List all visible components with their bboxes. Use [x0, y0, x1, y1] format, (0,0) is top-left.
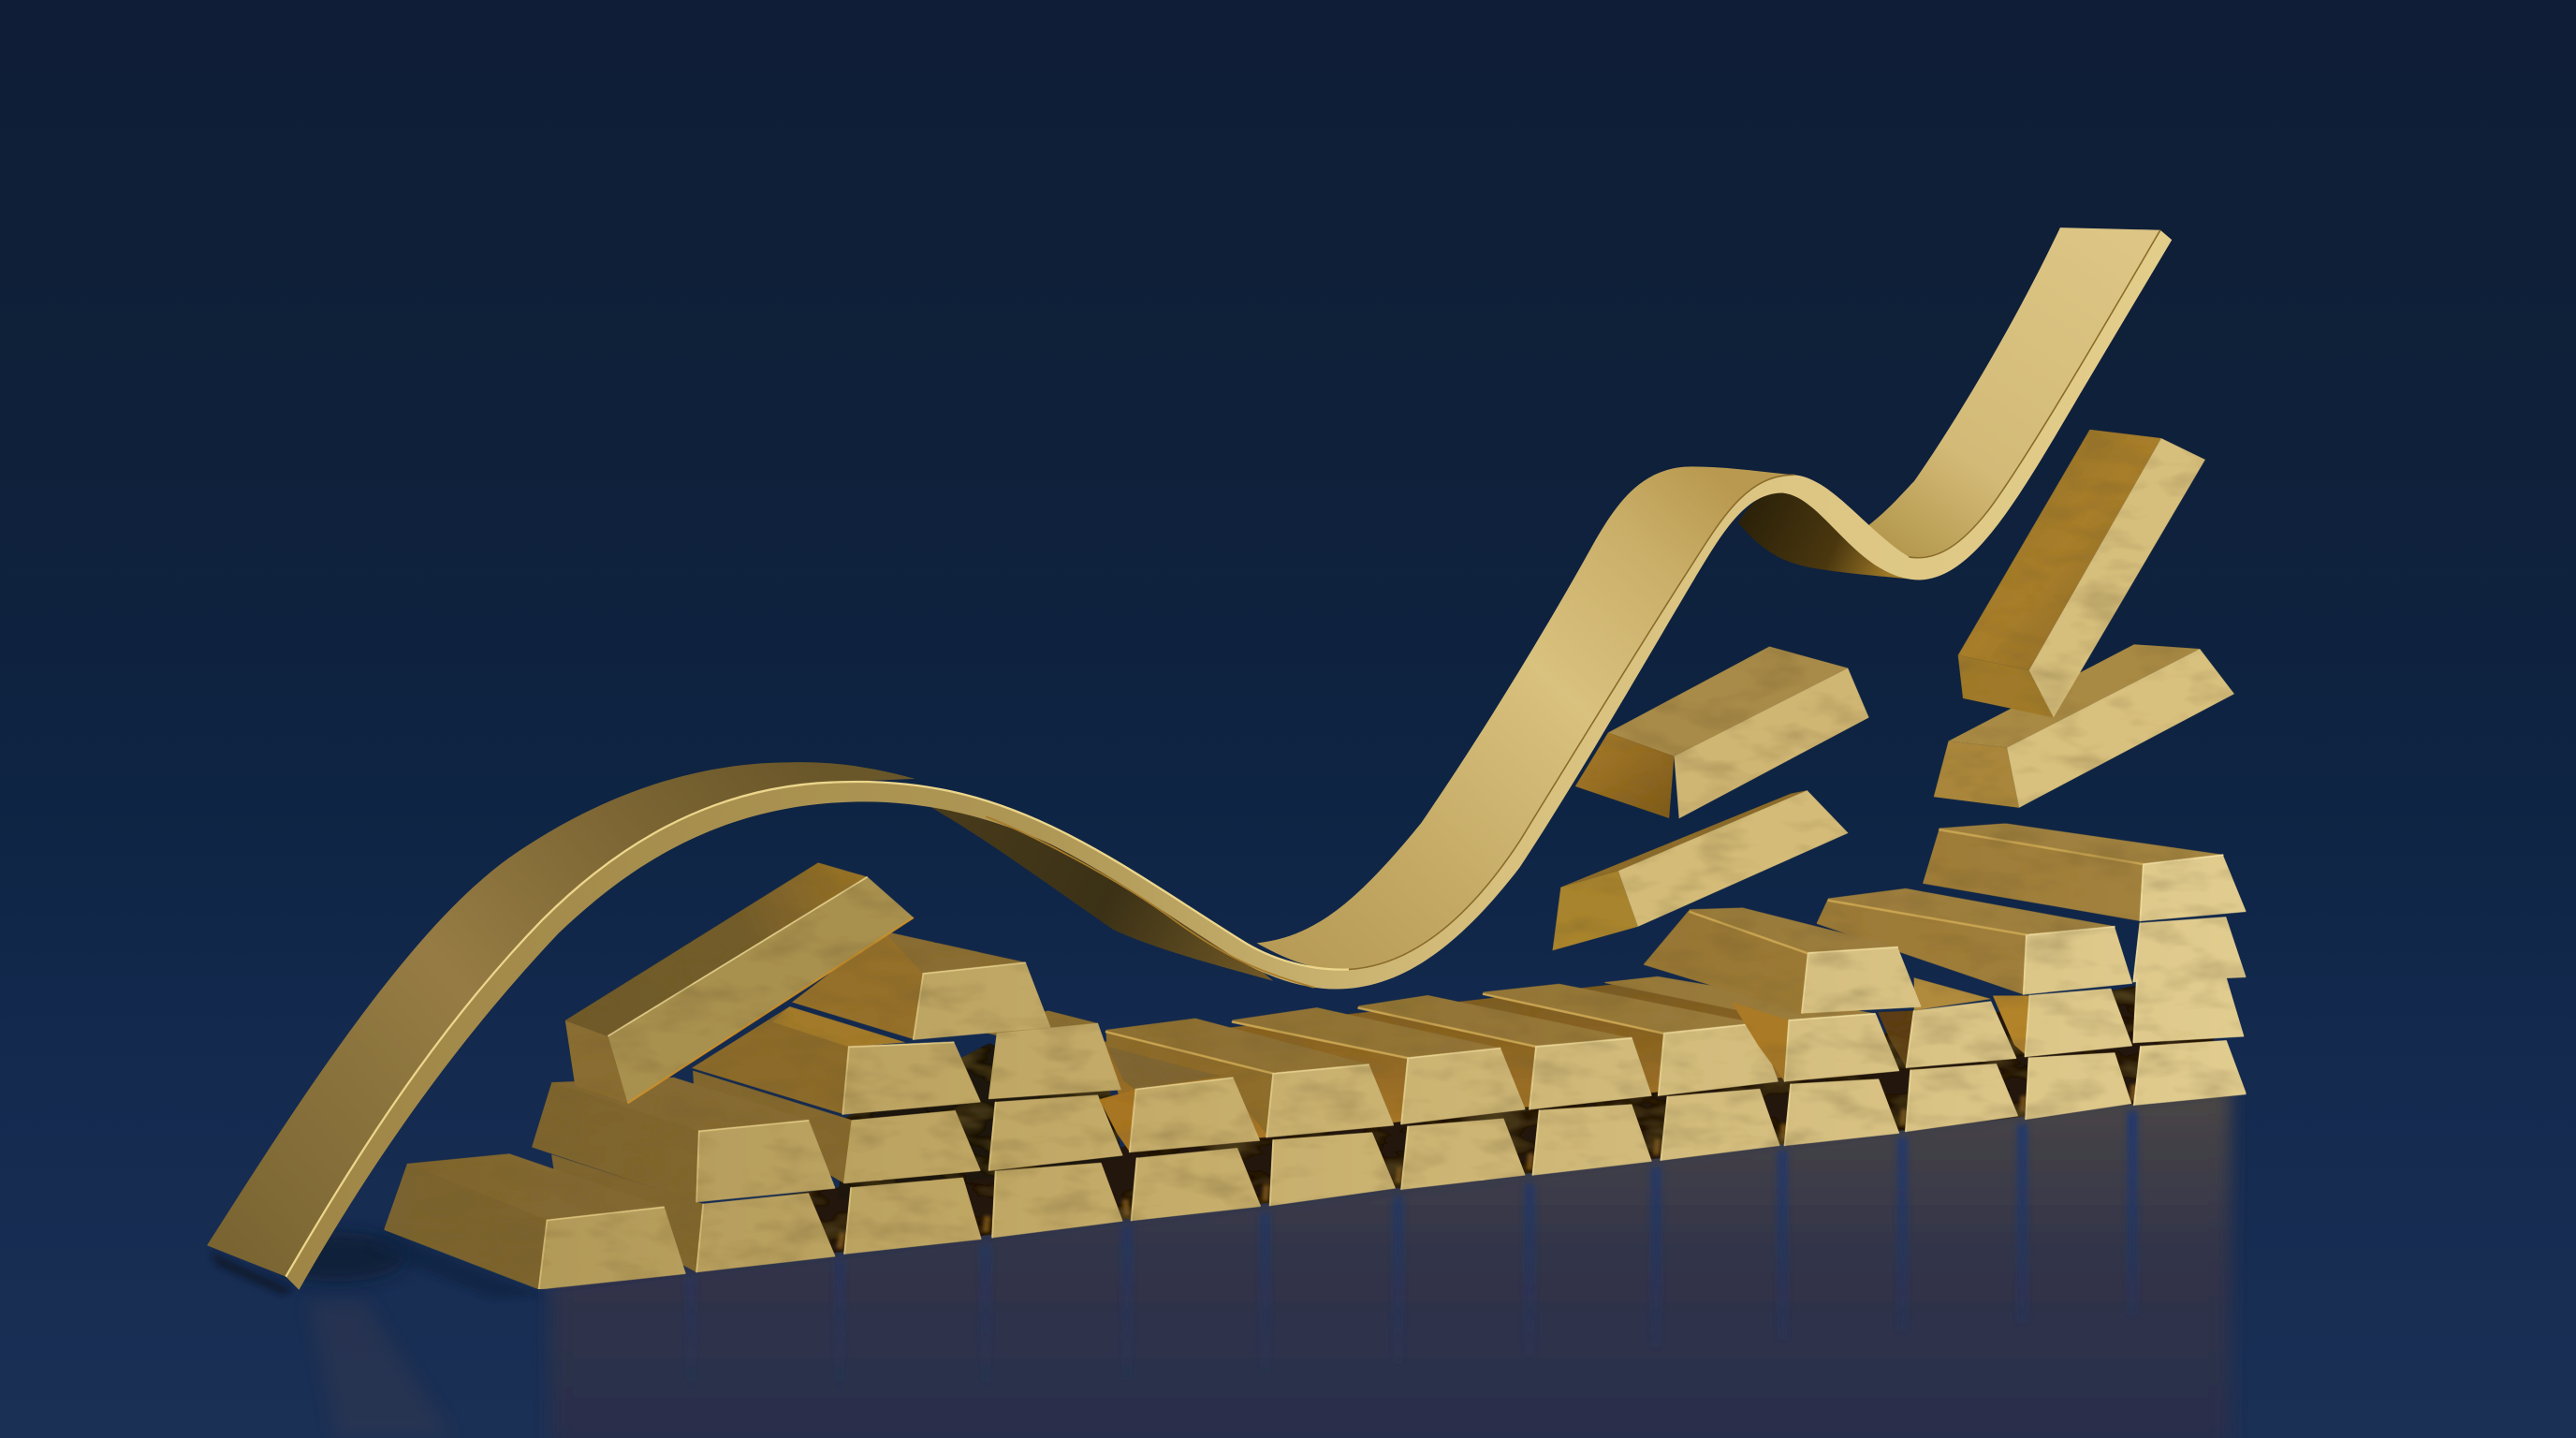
floating bar: upper left	[1575, 647, 1869, 818]
bar: top of left pile	[792, 932, 1050, 1039]
bar: bottom tier 5	[1132, 1149, 1260, 1220]
ribbon: dark crease along the right edge	[1349, 230, 2160, 969]
bar: bottom tier 8	[1533, 1105, 1651, 1175]
bar: third tier column 12, long bar	[1817, 888, 2131, 994]
gold bars: full stack and floating bars	[385, 430, 2246, 1289]
bar: third tier left pile	[692, 932, 1120, 1114]
orange glow on the side walls inside the gaps	[840, 1084, 2134, 1249]
floating bar: lower left	[1553, 790, 1848, 950]
bar: third tier column 4	[970, 1011, 1120, 1098]
ribbon: upper right face	[1868, 227, 2160, 558]
dark gaps behind the bar stack	[696, 983, 2217, 1269]
bar: wide second tier bar at far left	[533, 1078, 835, 1201]
bar: second tier column 12	[1993, 990, 2131, 1056]
bar: bottom tier 9	[1661, 1090, 1779, 1160]
bar: bottom tier 10	[1785, 1079, 1898, 1145]
bar: bottom tier 2	[552, 1155, 835, 1271]
ribbon: mid-section dark underside	[922, 801, 1273, 981]
bar: second tier column 13	[2133, 976, 2244, 1042]
ribbon: rising centre face	[1257, 466, 1794, 970]
bar: second tier above column 3	[694, 1071, 980, 1183]
ribbon line chart: gold curve rising to the right	[207, 227, 2172, 1290]
bar: tilted bar leaning on the left pile	[565, 862, 914, 1103]
bar: bottom tier 3	[844, 1178, 981, 1254]
bar: second tier column 6 with long side wall	[1106, 1019, 1393, 1137]
floating bar: steep right	[1958, 430, 2205, 717]
bar: second tier column 8	[1358, 996, 1651, 1109]
ribbon: orange lower edge	[986, 816, 1314, 988]
floor reflection of the gold stack	[309, 1084, 2231, 1438]
floating bar: low right	[1934, 644, 2234, 808]
shared orange side faces behind the second-tier fronts	[1104, 979, 1794, 1151]
bar: third tier column 13	[2133, 917, 2246, 981]
contact shadows under ribbon foot and front bar	[211, 1232, 542, 1298]
ribbon: left wide arc face	[207, 762, 915, 1277]
bar stack: second tier	[694, 917, 2246, 1183]
bar: second tier column 9	[1484, 984, 1778, 1095]
bar: bottom tier 6	[1270, 1133, 1395, 1205]
ribbon: bright highlight along the left edge	[285, 782, 1349, 1277]
bar: bottom tier 11	[1906, 1064, 2017, 1131]
bar: raised bar above column 10	[1644, 908, 1921, 1013]
bottom tier: pale left bevels	[696, 1047, 2141, 1271]
bar: top tier right, highest in the stack	[1924, 824, 2246, 920]
bar: bottom tier 7	[1401, 1119, 1525, 1189]
bar: second tier above column 4	[989, 1095, 1122, 1170]
second tier: pale left bevels	[989, 923, 2140, 1170]
bar: second tier column 7	[1233, 1008, 1525, 1123]
ribbon: continuous thin edge strip	[285, 230, 2172, 1290]
bar: bottom tier 13	[2134, 1041, 2246, 1105]
bar stack: bottom tier	[552, 1041, 2246, 1271]
bar: front lying bar on the floor	[385, 1154, 685, 1289]
bar: bottom tier 12	[2026, 1053, 2130, 1119]
bar: second tier column 11	[1878, 977, 2016, 1068]
bar: second tier column 10	[1605, 976, 1898, 1081]
bar: bottom tier 4	[992, 1164, 1122, 1238]
bar: third tier large bar	[692, 1006, 980, 1114]
ribbon: hump underside	[1738, 490, 1919, 580]
bar: second tier column 5	[1099, 1047, 1259, 1152]
